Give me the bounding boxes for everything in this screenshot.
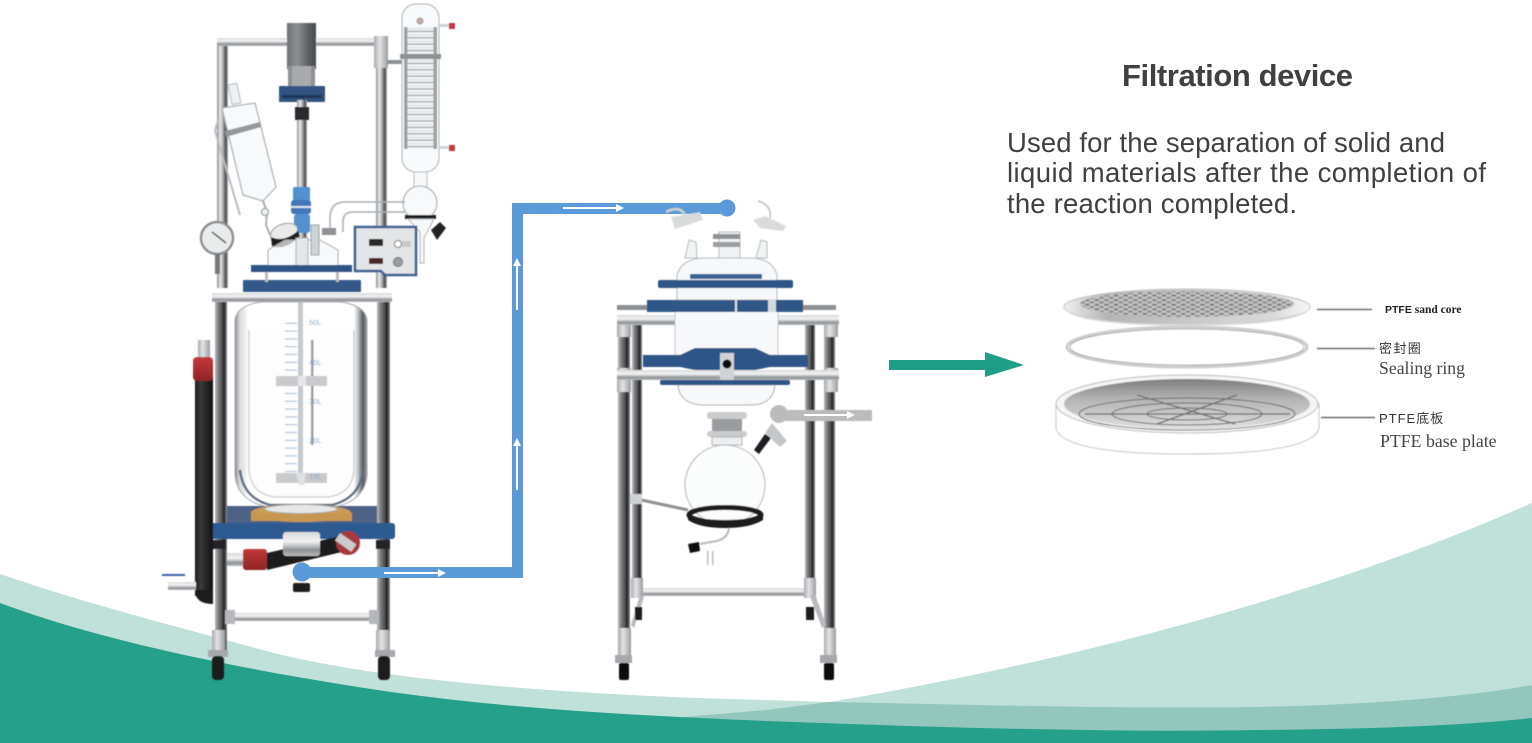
exploded filter diagram (1056, 289, 1375, 454)
volume scale labels: 10L (309, 472, 322, 481)
grey outlet pipe backing (770, 405, 872, 423)
label: PTFE sand core: PTFE sand core (1385, 304, 1462, 316)
label: PTFE base plate: PTFE base plate (1380, 431, 1497, 451)
label: PTFE base plate (1379, 411, 1497, 451)
sealing ring (1067, 327, 1307, 367)
reactor vessel (235, 302, 367, 507)
glass head and fittings (268, 225, 338, 268)
label: sealing ring: 密封圈 (1379, 341, 1422, 356)
label: sealing ring (1379, 341, 1465, 378)
volume scale labels: 40L (309, 358, 322, 367)
volume scale labels: 30L (309, 397, 322, 406)
side hose and drain valve (162, 340, 213, 604)
blue feed pipe with flow arrows (292, 200, 736, 582)
upper glass dome and valves (666, 201, 786, 300)
leader lines (1317, 310, 1375, 418)
background waves (0, 503, 1532, 743)
base plate (1056, 375, 1319, 454)
description text: Used for the separation of solid and (1007, 127, 1445, 158)
bottom outlet valve and hose (227, 531, 360, 592)
glass cylinder (675, 300, 778, 405)
grey outlet pipe arrow (804, 411, 855, 419)
sand core disc (1064, 289, 1310, 325)
condenser (330, 4, 455, 263)
description text (1007, 127, 1486, 219)
reactor frame posts and rails (212, 36, 403, 650)
filtration unit: right device on stand (615, 201, 872, 680)
dropping funnel (215, 83, 276, 235)
label: PTFE base plate: PTFE底板 (1379, 411, 1444, 426)
teal arrow pointing to filter detail (889, 352, 1024, 377)
description text: the reaction completed. (1007, 188, 1297, 219)
control box (355, 227, 416, 275)
white flow arrows (384, 204, 624, 577)
filter stand frame (615, 305, 839, 680)
filter neck and receiving flask (630, 412, 787, 565)
title: Filtration device (1122, 58, 1353, 93)
volume scale labels: 50L (309, 318, 322, 327)
cork ring and blue platform (207, 504, 395, 549)
stirring shaft and blue coupling (291, 100, 311, 270)
volume scale labels: 20L (309, 436, 322, 445)
stirring motor (279, 23, 325, 102)
label: sealing ring: Sealing ring (1379, 358, 1465, 378)
reactor: left jacketed glass reactor on stand (162, 4, 455, 680)
blue filter flanges (643, 274, 808, 385)
description text: liquid materials after the completion of (1007, 157, 1486, 188)
pressure gauges (201, 220, 300, 274)
volume scale labels (309, 318, 322, 481)
casters (208, 630, 395, 680)
sight port (720, 353, 734, 380)
blue flanges (243, 265, 361, 292)
